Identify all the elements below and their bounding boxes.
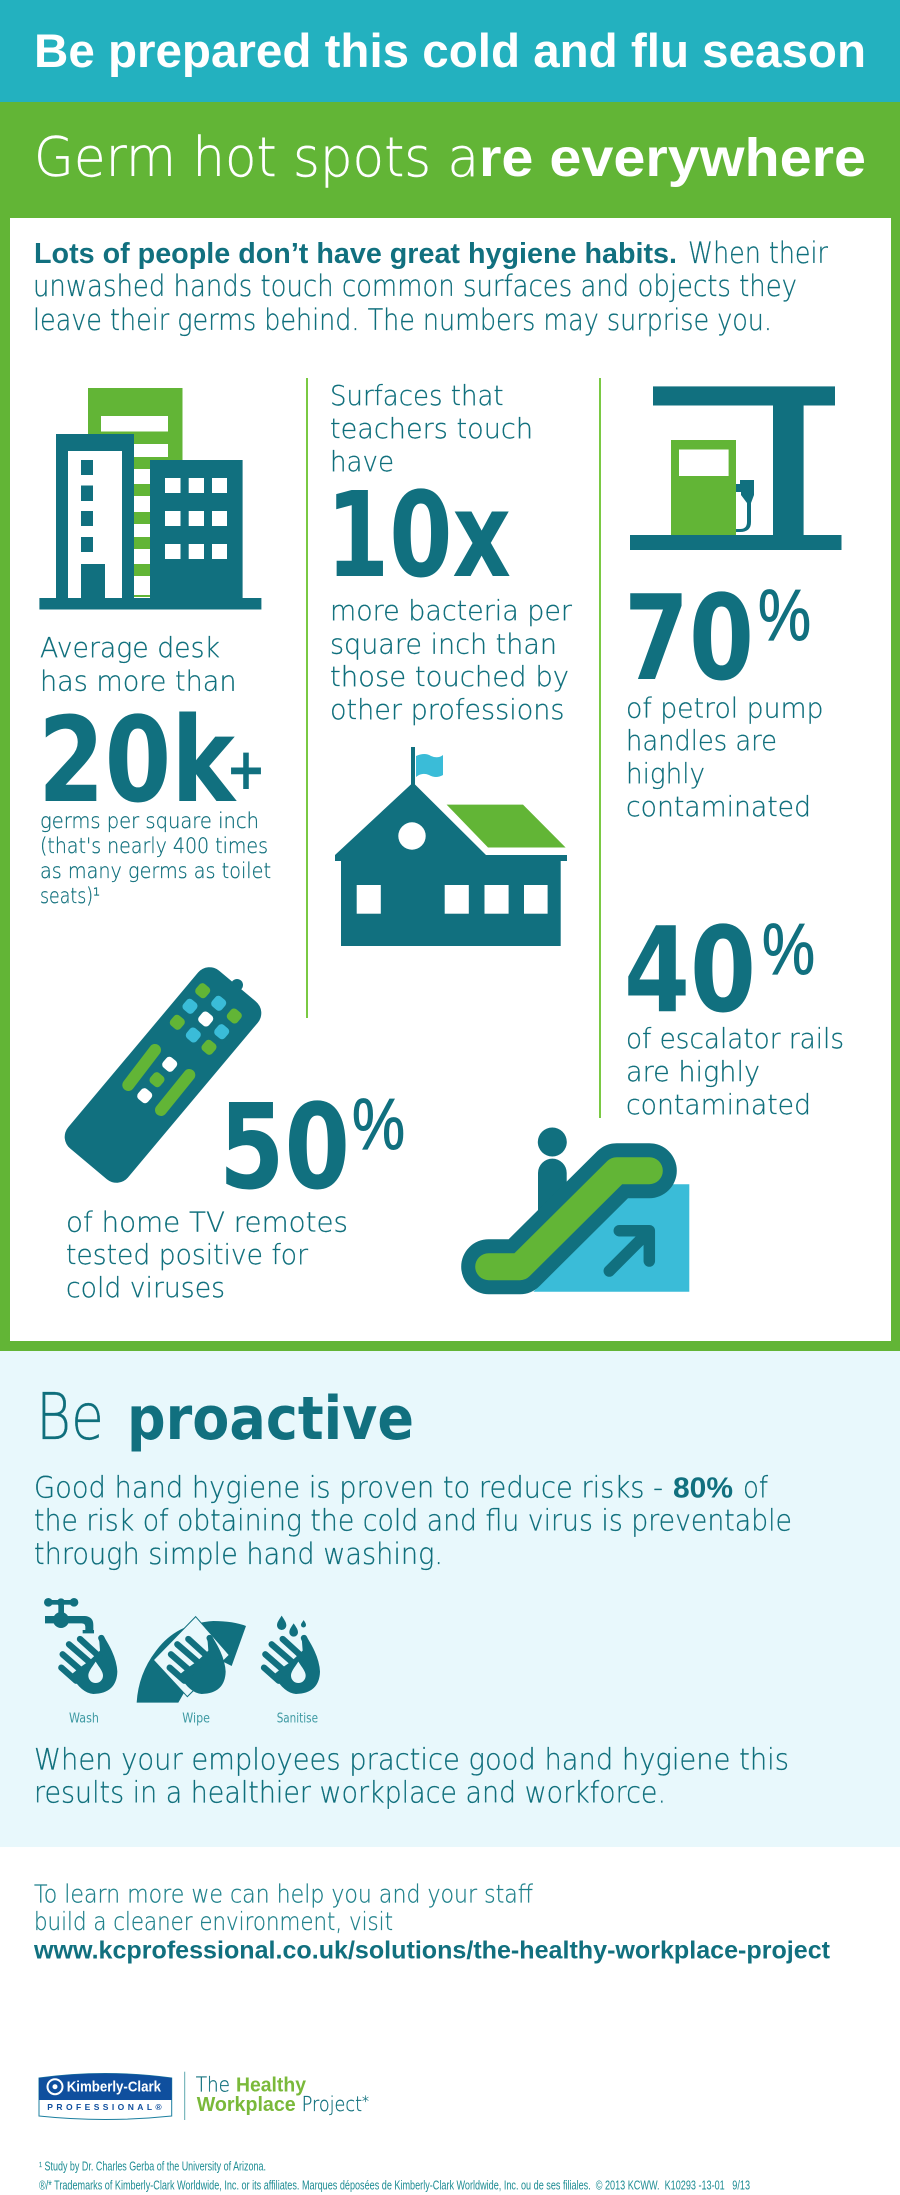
stat lead-in: teachers touch (330, 412, 533, 445)
icon: sanitise (264, 1616, 320, 1694)
icon labels: Wipe (182, 1711, 210, 1727)
closing text (34, 1742, 789, 1810)
icon labels (69, 1711, 318, 1727)
heading: germ hot spots: Germ hot spots a (34, 126, 479, 189)
logo: the healthy workplace project: Project (302, 2092, 362, 2116)
big number: 40%: % (762, 910, 815, 990)
intro text: When their (688, 236, 828, 270)
stat detail: of petrol pump (626, 691, 824, 724)
big number: 50%: 50 (219, 1078, 350, 1216)
icon: wash (44, 1598, 117, 1694)
proactive body text (34, 1471, 792, 1571)
header band (0, 0, 900, 102)
stat lead-in: has more than (40, 664, 236, 698)
stat: petrol pumps (624, 569, 824, 823)
intro text: Lots of people don’t have great hygiene habits. (34, 238, 677, 270)
stat detail: as many germs as toilet (40, 859, 271, 884)
big number: 10x: 10x (326, 466, 511, 604)
icon: petrol pump (630, 386, 842, 550)
logo: kimberly-clark professional: PROFESSIONAL® (47, 2102, 162, 2112)
closing text: When your employees practice good hand hygiene this (34, 1742, 789, 1776)
stat detail: other professions (330, 693, 564, 726)
call to action: To learn more we can help you and your staff (34, 1879, 533, 1908)
stat lead-in (330, 379, 533, 478)
heading: germ hot spots: re everywhere (479, 128, 866, 188)
big number: 50%: % (352, 1085, 405, 1165)
icon: wipe (137, 1617, 246, 1703)
stat detail: cold viruses (66, 1271, 225, 1304)
big number: 40%: 40 (624, 901, 756, 1039)
closing text: results in a healthier workplace and workforce. (34, 1776, 666, 1810)
logo: the healthy workplace project: Workplace (197, 2093, 296, 2116)
proactive body text: of (743, 1471, 769, 1505)
stat detail: contaminated (626, 790, 811, 823)
stat detail: those touched by (330, 660, 569, 693)
stat: teachers (326, 379, 572, 726)
stat detail: of escalator rails (626, 1022, 844, 1055)
stat detail (40, 809, 271, 909)
stat detail (66, 1206, 348, 1304)
stat detail: square inch than (330, 628, 557, 660)
intro text: leave their germs behind. The numbers may surprise you. (33, 303, 772, 337)
stat lead-in: have (330, 445, 394, 478)
big number: 70%: 70 (624, 569, 754, 707)
icon: escalator (489, 1128, 689, 1292)
stat lead-in: Average desk (40, 631, 220, 664)
call to action: build a cleaner environment, visit (34, 1907, 393, 1936)
stat detail: seats)¹ (40, 884, 100, 909)
logo: the healthy workplace project: * (362, 2094, 369, 2110)
stat detail: of home TV remotes (66, 1206, 348, 1239)
website url: www.kcprofessional.co.uk/solutions/the-healthy-workplace-project (33, 1936, 831, 1964)
footnotes (39, 2160, 750, 2192)
stat lead-in: Surfaces that (330, 379, 504, 412)
panel: be proactive (0, 1351, 900, 1847)
heading: be proactive: Be (36, 1381, 104, 1455)
icon labels: Sanitise (277, 1711, 318, 1727)
big number: 20k+: + (226, 735, 266, 803)
icon: office buildings (39, 388, 261, 610)
stat: tv remotes (66, 1078, 405, 1304)
stat detail: tested positive for (66, 1238, 308, 1271)
logo: the healthy workplace project: The (196, 2073, 230, 2097)
stat detail: contaminated (626, 1088, 811, 1121)
proactive body text: the risk of obtaining the cold and flu virus is preventable (34, 1504, 792, 1538)
icon: school (335, 747, 567, 946)
logo: the healthy workplace project: Healthy (236, 2074, 307, 2097)
intro text (33, 236, 828, 337)
stat detail (330, 594, 572, 726)
call to action (33, 1879, 831, 1964)
panel: germ hot spots (0, 102, 900, 1351)
heading: be proactive (36, 1381, 414, 1455)
big number: 70%: % (758, 576, 811, 656)
stat detail: (that's nearly 400 times (40, 834, 268, 859)
stat detail (626, 691, 824, 823)
intro text: unwashed hands touch common surfaces and objects they (33, 269, 797, 303)
footnotes: ¹ Study by Dr. Charles Gerba of the University of Arizona. (39, 2160, 266, 2174)
stat: escalator rails (624, 901, 844, 1121)
heading: be proactive: proactive (127, 1384, 414, 1454)
stat lead-in (40, 631, 236, 698)
heading: germ hot spots (34, 126, 866, 189)
proactive body text: Good hand hygiene is proven to reduce risks - (34, 1471, 663, 1505)
stat detail: germs per square inch (40, 809, 259, 834)
logo divider (184, 2072, 185, 2120)
stat: average desk (38, 631, 271, 909)
stat detail (626, 1022, 844, 1121)
stat detail: are highly (626, 1055, 760, 1088)
logo: kimberly-clark professional: Kimberly-Clark (67, 2079, 162, 2096)
big number: 20k+: 20k (38, 691, 237, 829)
stat detail: more bacteria per (330, 594, 572, 627)
title: Be prepared this cold and flu season (34, 24, 866, 77)
stat detail: handles are (626, 724, 777, 757)
logo: the healthy workplace project (196, 2073, 369, 2116)
icon labels: Wash (69, 1711, 99, 1727)
icon: tv remote (59, 961, 267, 1189)
proactive body text: through simple hand washing. (34, 1537, 443, 1571)
column dividers (306, 378, 601, 1118)
proactive body text: 80% (673, 1473, 733, 1505)
stat detail: highly (626, 757, 705, 790)
logo: kimberly-clark professional (39, 2074, 172, 2120)
